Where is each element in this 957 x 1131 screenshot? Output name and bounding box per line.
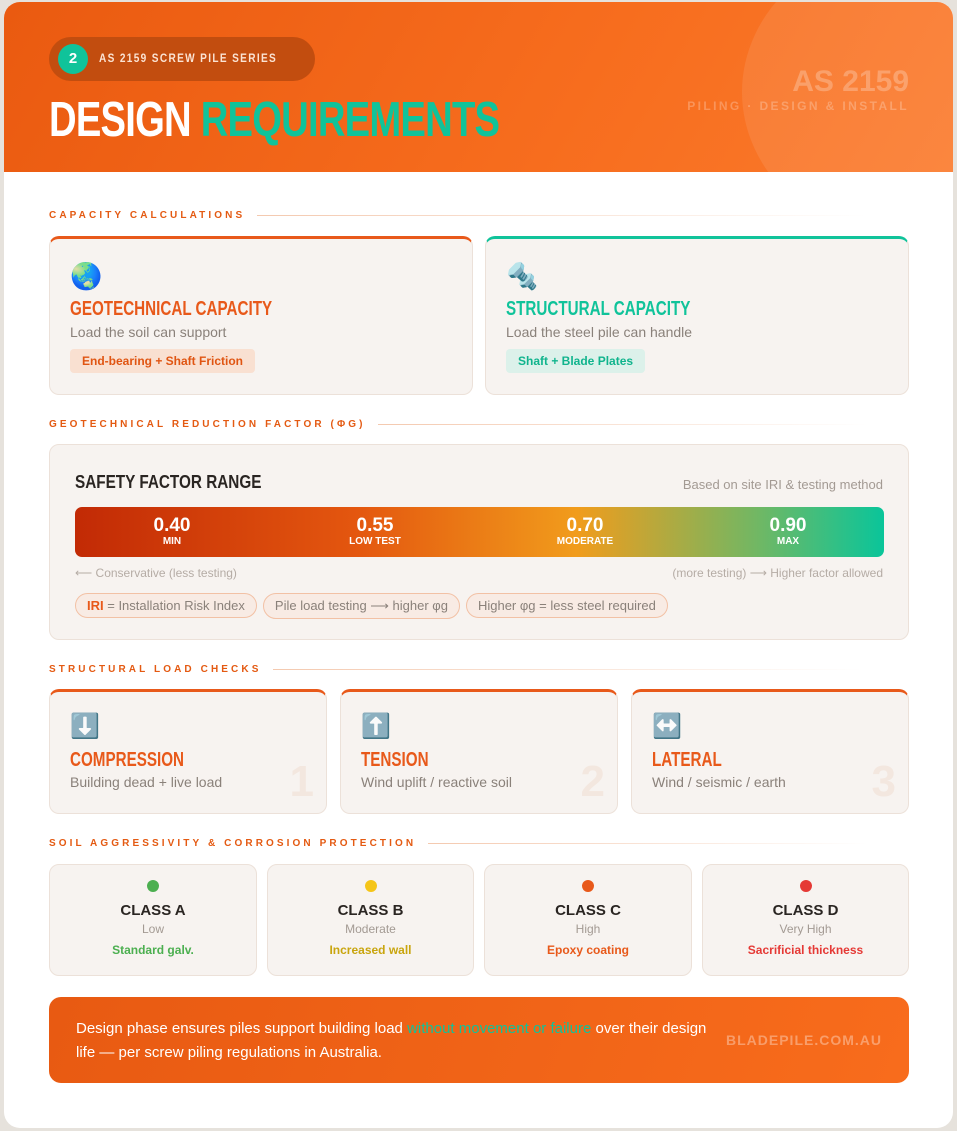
panel: compression <box>49 689 327 814</box>
section heading: reduction factor: GEOTECHNICAL REDUCTION FACTOR (ΦG) <box>49 419 366 430</box>
class B <box>267 864 474 976</box>
series pill: AS 2159 SCREW PILE SERIES <box>99 51 277 65</box>
chips <box>75 593 668 619</box>
class D: CLASS D <box>773 902 838 919</box>
panel: compression: COMPRESSION <box>70 749 184 771</box>
panel: structural: Shaft + Blade Plates <box>518 354 633 368</box>
class A: Low <box>142 922 164 936</box>
panel: lateral <box>631 689 909 814</box>
class A: Standard galv. <box>112 943 194 957</box>
standard label: PILING · DESIGN & INSTALL <box>687 99 909 113</box>
panel: safety factor range: Based on site IRI & testing method <box>683 477 883 492</box>
gradient bar: MODERATE <box>557 536 613 547</box>
panel: structural <box>485 236 909 395</box>
class B: Increased wall <box>329 943 412 957</box>
panel: safety factor range: (more testing) ⟶ Higher factor allowed <box>672 566 883 580</box>
panel: compression: 1 <box>290 757 314 806</box>
panel: tension: ⬆️ <box>361 713 391 740</box>
panel: safety factor range: SAFETY FACTOR RANGE <box>75 472 261 492</box>
standard label <box>687 65 909 113</box>
gradient bar: MAX <box>777 536 799 547</box>
panel: safety factor range: ⟵ Conservative (less testing) <box>75 566 237 580</box>
series pill <box>49 37 315 81</box>
class A: CLASS A <box>120 902 186 919</box>
panel: lateral: LATERAL <box>652 749 722 771</box>
chips: Higher φg = less steel required <box>478 598 656 613</box>
panel: geotechnical: Load the soil can support <box>70 324 226 340</box>
panel: geotechnical <box>49 236 473 395</box>
class B: CLASS B <box>338 902 403 919</box>
section heading: soil: SOIL AGGRESSIVITY & CORROSION PROTECTION <box>49 838 416 849</box>
class D: Very High <box>779 922 832 936</box>
panel: lateral: ↔️ <box>652 713 682 740</box>
class C <box>484 864 692 976</box>
panel: tension: TENSION <box>361 749 429 771</box>
gradient bar: MIN <box>163 536 181 547</box>
gradient bar: 0.90 <box>770 515 806 536</box>
panel: structural: 🔩 <box>506 261 538 291</box>
panel: compression: Building dead + live load <box>70 774 222 790</box>
panel: geotechnical: 🌏 <box>70 261 102 291</box>
panel: structural: Load the steel pile can handle <box>506 324 692 340</box>
panel: tension: 2 <box>581 757 605 806</box>
chips: Pile load testing ⟶ higher φg <box>275 598 448 613</box>
class D <box>702 864 909 976</box>
class B: Moderate <box>345 922 396 936</box>
standard label: AS 2159 <box>792 65 909 98</box>
class D: Sacrificial thickness <box>748 943 863 957</box>
gradient bar <box>75 507 884 557</box>
panel: compression: ⬇️ <box>70 713 100 740</box>
panel: tension <box>340 689 618 814</box>
class A <box>49 864 257 976</box>
panel: safety factor range <box>49 444 909 640</box>
panel: structural: STRUCTURAL CAPACITY <box>506 298 690 320</box>
class C: High <box>576 922 600 936</box>
panel: geotechnical: GEOTECHNICAL CAPACITY <box>70 298 272 320</box>
series pill: 2 <box>69 50 77 67</box>
panel: lateral: Wind / seismic / earth <box>652 774 786 790</box>
class C: Epoxy coating <box>547 943 629 957</box>
panel: lateral: 3 <box>872 757 896 806</box>
panel: tension: Wind uplift / reactive soil <box>361 774 512 790</box>
section heading: load checks: STRUCTURAL LOAD CHECKS <box>49 664 261 675</box>
panel: geotechnical: End-bearing + Shaft Friction <box>82 354 243 368</box>
section heading: capacity: CAPACITY CALCULATIONS <box>49 210 245 221</box>
gradient bar: 0.40 <box>154 515 190 536</box>
gradient bar: LOW TEST <box>349 536 401 547</box>
footer callout <box>49 997 909 1083</box>
header <box>4 2 953 172</box>
footer callout: Design phase ensures piles support building load without movement or failure over their design life — per screw piling regulations in Australia. <box>76 1020 706 1061</box>
chips: IRI = Installation Risk Index <box>87 598 245 613</box>
gradient bar: 0.70 <box>566 515 603 536</box>
gradient bar: 0.55 <box>356 515 393 536</box>
class C: CLASS C <box>555 902 621 919</box>
footer callout: BLADEPILE.COM.AU <box>726 1032 882 1048</box>
title: DESIGN REQUIREMENTS <box>49 93 499 147</box>
